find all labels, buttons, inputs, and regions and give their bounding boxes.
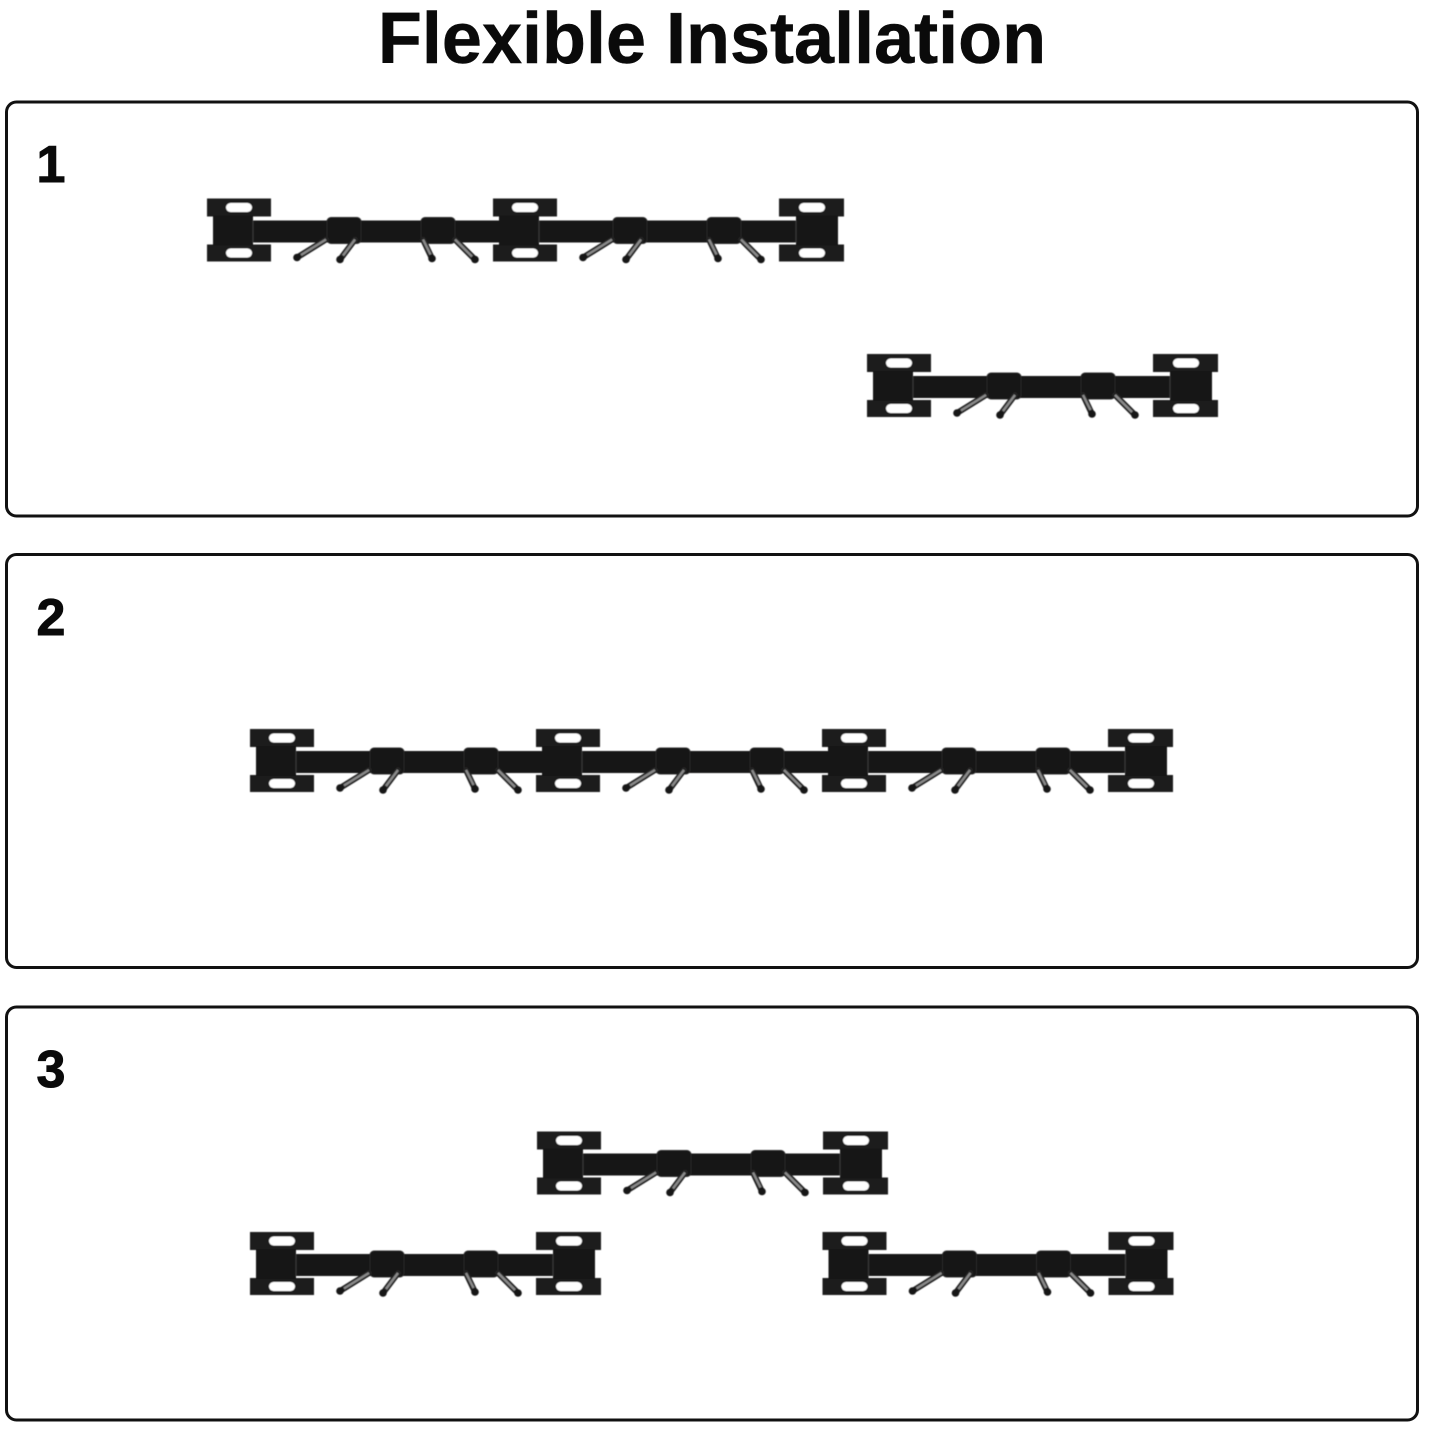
panel 2 frame	[6, 554, 1418, 968]
title: Flexible Installation	[378, 0, 1046, 79]
rack: three-section rail	[250, 729, 1173, 794]
panel: option 2	[6, 554, 1418, 968]
rack: single-section rail	[867, 354, 1218, 419]
rack: bottom-right single rail	[822, 1232, 1174, 1297]
panel 1 number: 1	[36, 136, 65, 194]
rack: two-section rail	[207, 198, 844, 263]
panel 3 number: 3	[36, 1041, 65, 1099]
panel 2 number: 2	[36, 589, 65, 647]
panel: option 3	[6, 1007, 1418, 1420]
rack: bottom-left single rail	[250, 1232, 601, 1297]
panel 1 frame	[6, 102, 1418, 516]
rack: top single rail	[537, 1132, 888, 1196]
panel 3 frame	[6, 1007, 1418, 1420]
panel: option 1	[6, 102, 1418, 516]
